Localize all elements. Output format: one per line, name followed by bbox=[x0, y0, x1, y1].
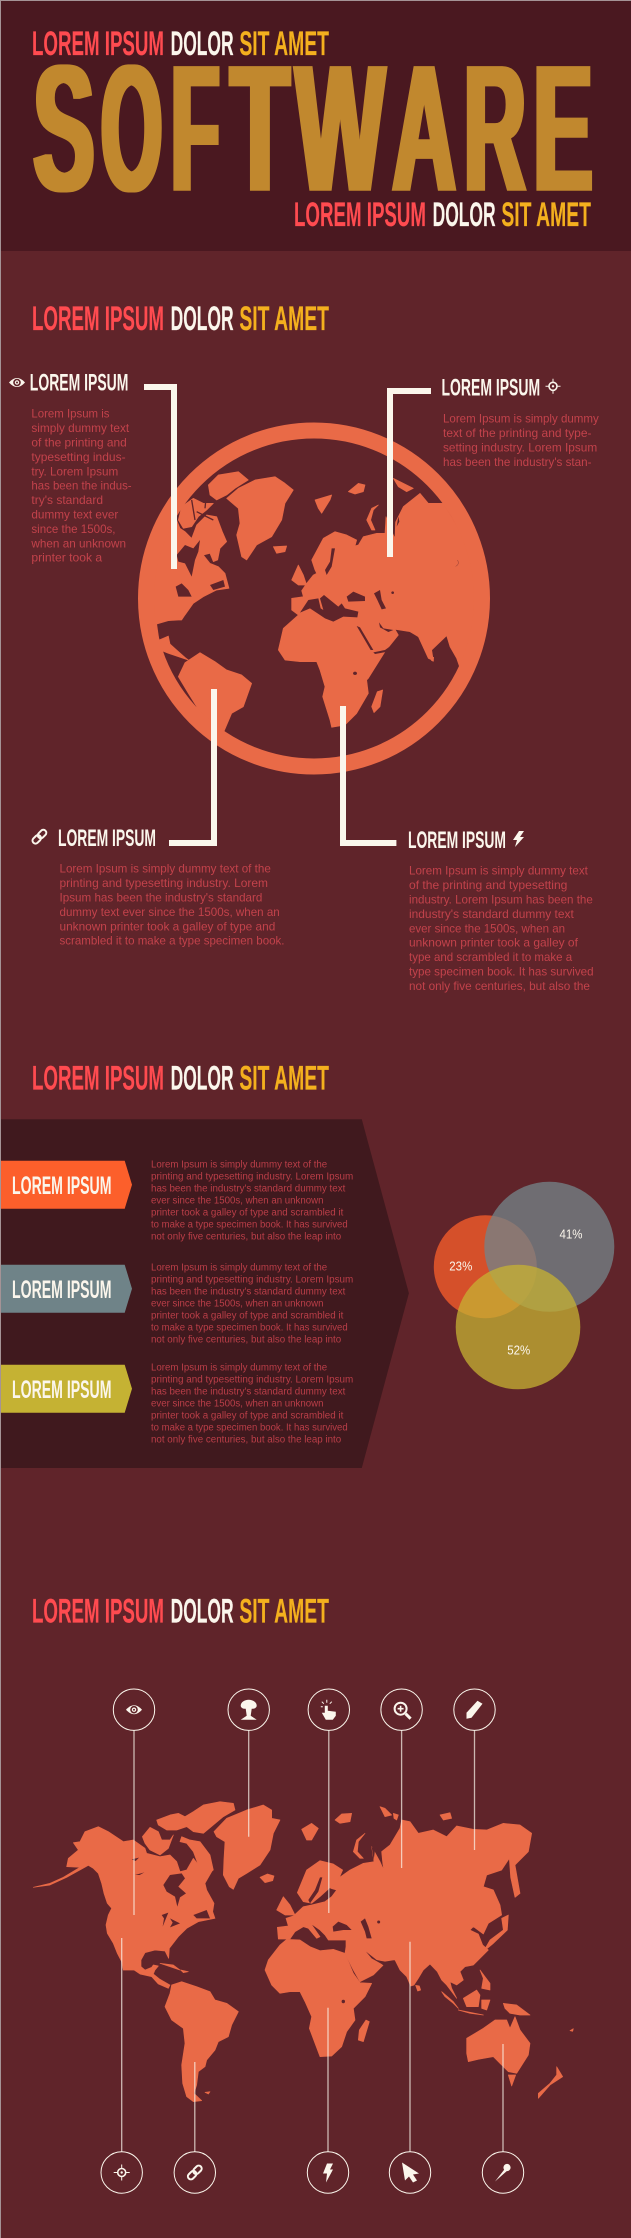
callout: top left: LOREM IPSUM bbox=[30, 370, 128, 397]
callout: bottom left: Ipsum has been the industry's standard bbox=[60, 890, 262, 904]
callout: bottom left bbox=[31, 825, 284, 948]
venn diagram: 23% bbox=[449, 1258, 473, 1274]
title: SOFTWARE: T bbox=[230, 27, 289, 229]
text block 1: to make a type specimen book. It has survived bbox=[151, 1219, 348, 1230]
callout: bottom right: type specimen book. It has survived bbox=[409, 964, 594, 978]
dark arrow panel bbox=[1, 1119, 409, 1468]
section heading: globe: LOREM IPSUM bbox=[32, 300, 164, 338]
text block 2 bbox=[151, 1262, 353, 1345]
venn diagram: 41% bbox=[560, 1227, 583, 1242]
tag: yellow: LOREM IPSUM bbox=[12, 1376, 112, 1404]
section heading: comparison: SIT AMET bbox=[239, 1059, 329, 1097]
tag: teal: LOREM IPSUM bbox=[12, 1276, 112, 1304]
pin: map pin bbox=[482, 2152, 524, 2193]
title: SOFTWARE: F bbox=[171, 27, 219, 230]
text block 2: to make a type specimen book. It has survived bbox=[151, 1322, 348, 1333]
callout: top right bbox=[442, 374, 599, 469]
text block 2: has been the industry's standard dummy text bbox=[151, 1286, 346, 1297]
section heading: comparison: DOLOR bbox=[171, 1059, 234, 1097]
callout: bottom right: industry's standard dummy text bbox=[409, 907, 574, 921]
section heading: globe: SIT AMET bbox=[239, 300, 329, 338]
title: SOFTWARE: E bbox=[534, 28, 593, 230]
callout: bottom left: LOREM IPSUM bbox=[58, 825, 156, 852]
callout: top right: LOREM IPSUM bbox=[442, 374, 540, 401]
callout: bottom left: dummy text ever since the 1500s, when an bbox=[60, 905, 280, 919]
callout: bottom left: unknown printer took a galley of type and bbox=[60, 919, 275, 933]
callout: bottom right bbox=[408, 827, 594, 993]
text block 3: to make a type specimen book. It has survived bbox=[151, 1422, 348, 1433]
bracket: top left bbox=[144, 384, 177, 569]
venn diagram bbox=[434, 1182, 614, 1389]
callout: top right: has been the industry's stan- bbox=[443, 455, 592, 469]
text block 1: has been the industry's standard dummy text bbox=[151, 1183, 346, 1194]
callout: bottom right: of the printing and typesetting bbox=[409, 878, 567, 892]
callout: bottom left: scrambled it to make a type specimen book. bbox=[60, 934, 284, 948]
callout: top left: when an unknown bbox=[30, 536, 126, 550]
callout: bottom right: type and scrambled it to make a bbox=[409, 950, 573, 964]
callout: bottom right: Lorem Ipsum is simply dummy text bbox=[409, 864, 589, 878]
pin: mushroom cloud bbox=[228, 1689, 269, 1730]
icon: eye bbox=[9, 378, 25, 387]
bracket: top right bbox=[387, 388, 431, 557]
title: SOFTWARE: W bbox=[296, 26, 385, 230]
bracket: bottom right bbox=[340, 706, 396, 846]
text block 1: ever since the 1500s, when an unknown bbox=[151, 1195, 324, 1206]
text block 2: not only five centuries, but also the leap into bbox=[151, 1334, 342, 1345]
venn diagram: 52% bbox=[507, 1343, 531, 1358]
callout: bottom right: not only five centuries, but also the bbox=[409, 979, 590, 993]
text block 2: printing and typesetting industry. Lorem Ipsum bbox=[151, 1274, 353, 1285]
callout: top left bbox=[9, 370, 132, 565]
title: SOFTWARE: R bbox=[464, 27, 526, 229]
text block 2: ever since the 1500s, when an unknown bbox=[151, 1298, 324, 1309]
text block 2: Lorem Ipsum is simply dummy text of the bbox=[151, 1262, 328, 1273]
title: SOFTWARE: O bbox=[101, 27, 162, 230]
text block 3: has been the industry's standard dummy text bbox=[151, 1386, 346, 1397]
section heading: map: LOREM IPSUM bbox=[32, 1593, 164, 1631]
title: top line: SIT AMET bbox=[239, 25, 329, 63]
text block 3: ever since the 1500s, when an unknown bbox=[151, 1398, 324, 1409]
callout: top right: text of the printing and type- bbox=[443, 426, 592, 440]
text block 3: printer took a galley of type and scrambled it bbox=[151, 1410, 344, 1421]
callout: top left: has been the indus- bbox=[31, 479, 132, 493]
text block 2: printer took a galley of type and scrambled it bbox=[151, 1310, 344, 1321]
world map bbox=[33, 1802, 573, 2102]
subtitle line: LOREM IPSUM bbox=[294, 196, 426, 234]
section heading: map: SIT AMET bbox=[239, 1593, 329, 1631]
pin lines bbox=[122, 1730, 503, 2152]
icon: target bbox=[546, 379, 560, 394]
pin: cursor bbox=[389, 2152, 431, 2193]
pin: pointing hand bbox=[308, 1689, 350, 1730]
tag: teal bbox=[1, 1265, 132, 1313]
section heading: globe: DOLOR bbox=[171, 300, 234, 338]
title: top line: LOREM IPSUM bbox=[32, 25, 164, 63]
pin: target bbox=[101, 2152, 142, 2193]
pin: magnifier bbox=[381, 1689, 422, 1730]
globe bbox=[146, 430, 487, 766]
callout: bottom right: unknown printer took a galley of bbox=[409, 936, 579, 950]
callout: top left: dummy text ever bbox=[31, 508, 118, 522]
callout: top left: of the printing and bbox=[31, 436, 127, 450]
text block 1: not only five centuries, but also the leap into bbox=[151, 1231, 342, 1242]
section heading: map: DOLOR bbox=[171, 1593, 234, 1631]
icon: link bbox=[31, 829, 48, 845]
callout: top left: simply dummy text bbox=[31, 421, 130, 435]
subtitle line: DOLOR bbox=[433, 196, 496, 234]
callout: top left: printer took a bbox=[31, 551, 103, 565]
callout: bottom left: Lorem Ipsum is simply dummy text of the bbox=[60, 862, 271, 876]
header band bbox=[0, 0, 631, 251]
icon: bolt bbox=[513, 831, 524, 847]
text block 1 bbox=[151, 1159, 353, 1242]
callout: top left: typesetting indus- bbox=[31, 450, 126, 464]
callout: bottom left: printing and typesetting industry. Lorem bbox=[60, 876, 268, 890]
tag: orange: LOREM IPSUM bbox=[12, 1172, 112, 1200]
title: SOFTWARE: S bbox=[33, 28, 94, 230]
pin: bolt bbox=[307, 2152, 349, 2193]
tag: yellow bbox=[1, 1365, 132, 1413]
callout: top left: Lorem Ipsum is bbox=[31, 407, 109, 421]
callout: top right: Lorem Ipsum is simply dummy bbox=[443, 412, 599, 426]
callout: bottom right: industry. Lorem Ipsum has been the bbox=[409, 892, 593, 906]
text block 3: printing and typesetting industry. Lorem Ipsum bbox=[151, 1374, 353, 1385]
callout: top left: since the 1500s, bbox=[31, 522, 115, 536]
callout: top left: try's standard bbox=[31, 493, 103, 507]
text block 3: Lorem Ipsum is simply dummy text of the bbox=[151, 1362, 328, 1373]
callout: top left: try. Lorem Ipsum bbox=[31, 464, 118, 478]
callout: top right: setting industry. Lorem Ipsum bbox=[443, 440, 597, 454]
text block 1: printing and typesetting industry. Lorem Ipsum bbox=[151, 1171, 353, 1182]
text block 3: not only five centuries, but also the leap into bbox=[151, 1434, 342, 1445]
callout: bottom right: LOREM IPSUM bbox=[408, 827, 506, 854]
title: SOFTWARE: A bbox=[392, 28, 456, 230]
text block 3 bbox=[151, 1362, 353, 1445]
pin: pencil bbox=[454, 1689, 495, 1730]
section heading: comparison: LOREM IPSUM bbox=[32, 1059, 164, 1097]
text block 1: printer took a galley of type and scrambled it bbox=[151, 1207, 344, 1218]
title: SOFTWARE bbox=[33, 26, 593, 230]
pin: link bbox=[174, 2152, 216, 2193]
callout: bottom right: ever since the 1500s, when an bbox=[409, 921, 565, 935]
tag: orange bbox=[1, 1161, 132, 1209]
bracket: bottom left bbox=[169, 689, 217, 846]
pin: eye bbox=[113, 1689, 155, 1730]
text block 1: Lorem Ipsum is simply dummy text of the bbox=[151, 1159, 328, 1170]
title: top line: DOLOR bbox=[171, 25, 234, 63]
